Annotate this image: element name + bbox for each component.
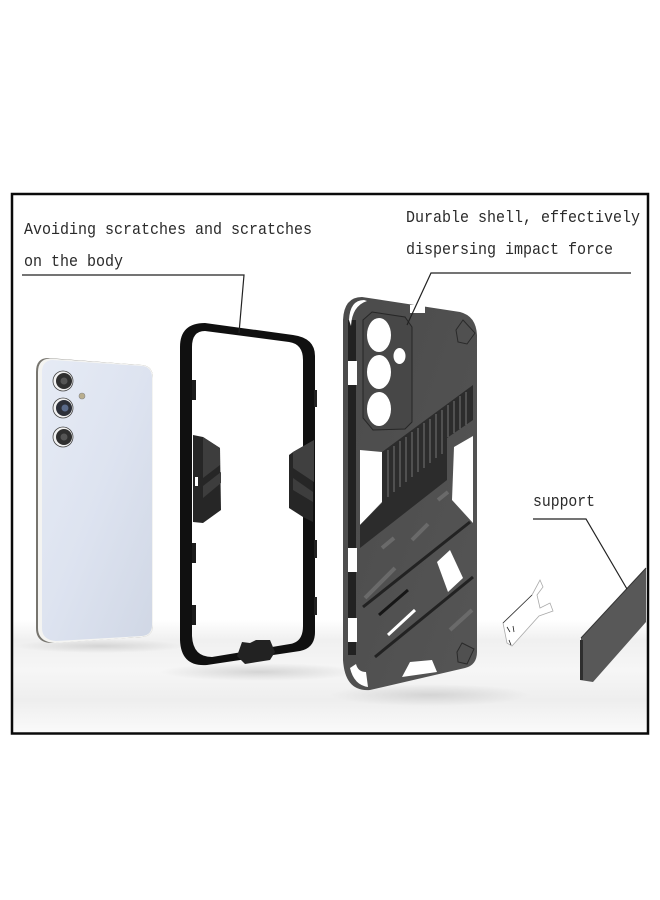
camera island — [363, 312, 412, 430]
ribbed heat vent — [360, 385, 473, 548]
text: support: support — [533, 493, 595, 512]
case shell — [343, 297, 477, 690]
left rail — [348, 320, 356, 655]
corner badges — [456, 320, 475, 664]
floor shadows — [15, 639, 530, 706]
callout line: shell — [407, 273, 631, 325]
text: scratches callout — [24, 221, 312, 272]
right clip — [289, 440, 314, 522]
text: shell callout: dispersing impact force — [406, 241, 613, 260]
text: shell callout — [406, 209, 640, 260]
outer frame — [12, 194, 648, 734]
stand bracket — [503, 580, 553, 646]
left clip — [193, 435, 221, 523]
phone — [36, 358, 153, 643]
bumper frame — [180, 323, 317, 665]
callout line: scratches — [22, 275, 244, 333]
text: scratches callout: Avoiding scratches and scratches — [24, 221, 312, 240]
text: scratches callout: on the body — [24, 253, 123, 272]
bottom clip — [237, 640, 275, 664]
phone cameras — [53, 371, 85, 447]
callout line: support — [533, 519, 627, 589]
kickstand slab — [363, 492, 473, 657]
support piece — [580, 568, 646, 682]
floor background — [13, 620, 647, 732]
cutouts — [360, 436, 473, 677]
left rail windows — [348, 300, 425, 687]
